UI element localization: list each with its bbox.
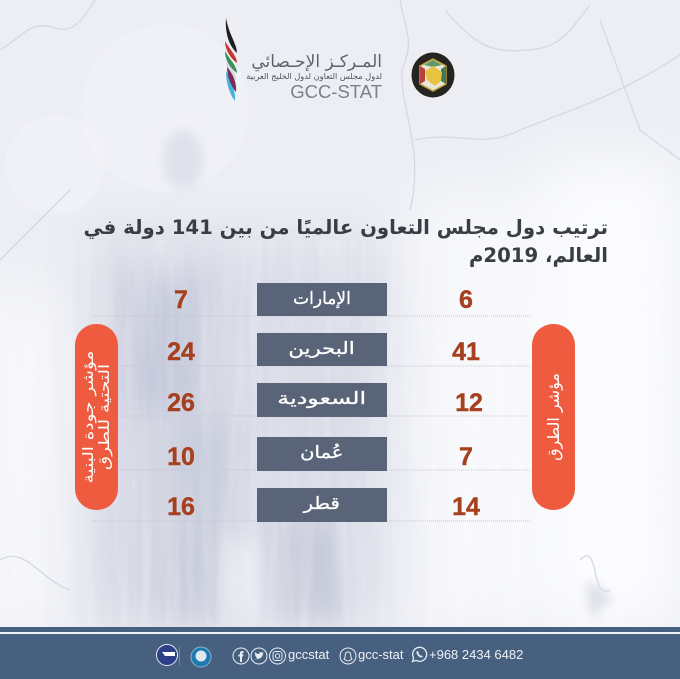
emblem: GCC (412, 52, 454, 98)
left value: Qatar: 16 (167, 493, 195, 521)
row label: Qatar: قطر (304, 494, 340, 514)
left pill: road infrastructure quality index: مؤشر جودة البنية (80, 351, 96, 483)
row label: Bahrain: البحرين (289, 339, 355, 359)
handle: gccstat: gccstat (288, 647, 329, 662)
row label: Saudi Arabia (257, 383, 387, 417)
handle: gcc-stat: gcc-stat (358, 647, 404, 662)
title: العالم، 2019م (469, 244, 608, 267)
phone number: +968 2434 6482 (429, 647, 523, 662)
logo Arabic name: المـركـز الإحـصائي (251, 52, 382, 72)
footer band (0, 627, 680, 679)
left pill: road infrastructure quality index: التحتية للطرق (96, 364, 112, 470)
logo: GCC-STAT (225, 18, 382, 102)
left value: Saudi Arabia: 26 (167, 389, 195, 417)
left value: Oman: 10 (167, 443, 195, 471)
row label: Saudi Arabia: السعودية (278, 389, 366, 409)
icon: snapchat (340, 648, 356, 664)
row label: Qatar (257, 488, 387, 522)
logo stripes (225, 18, 237, 101)
right value: Saudi Arabia: 12 (455, 389, 483, 417)
logo Latin name: GCC-STAT (290, 81, 382, 102)
logo subtitle: لدول مجلس التعاون لدول الخليج العربية (246, 71, 382, 81)
right value: Qatar: 14 (452, 493, 480, 521)
icon: whatsapp (412, 646, 428, 662)
title (83, 216, 608, 267)
right value: Bahrain: 41 (452, 338, 480, 366)
title: ترتيب دول مجلس التعاون عالميًا من بين 141 دولة في (83, 216, 608, 239)
left value: Bahrain: 24 (167, 338, 195, 366)
right pill: road index (532, 324, 575, 510)
social icons: facebook, twitter, instagram (232, 648, 286, 664)
row label: UAE (257, 283, 387, 316)
faint top shapes (5, 24, 249, 215)
footer top stripe (0, 632, 680, 634)
row label: Oman: عُمان (300, 443, 344, 463)
right value: UAE: 6 (459, 286, 473, 314)
certification badges (156, 644, 212, 668)
right value: Oman: 7 (459, 443, 473, 471)
row label: UAE: الإمارات (293, 289, 351, 309)
right pill: road index: مؤشر الطرق (544, 373, 562, 461)
left value: UAE: 7 (174, 286, 188, 314)
row label: Oman (257, 437, 387, 471)
row label: Bahrain (257, 333, 387, 366)
left pill: road infrastructure quality index (75, 324, 118, 510)
